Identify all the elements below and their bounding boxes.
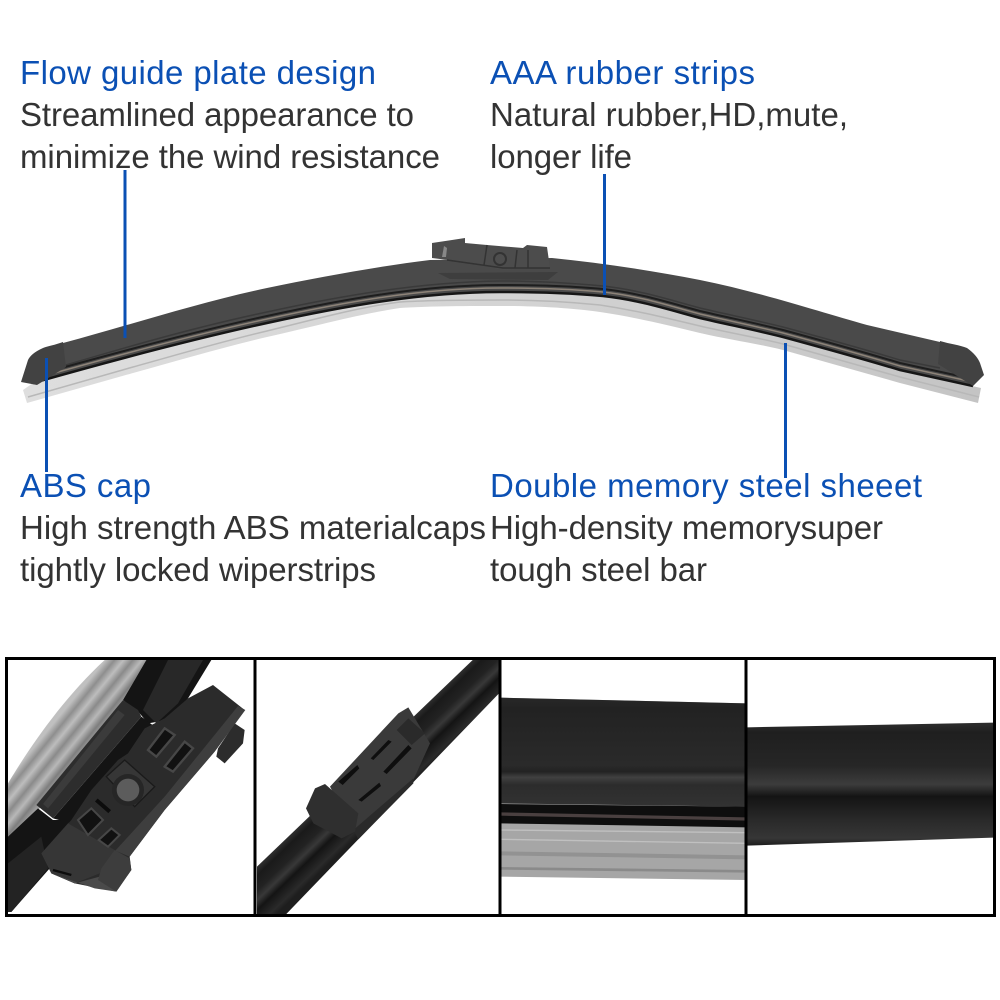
heading: ABS cap: tightly locked wiperstrips (20, 551, 376, 588)
heading: flow guide plate design: Streamlined appearance to (20, 96, 414, 133)
panel frames (6, 658, 994, 916)
clip (432, 238, 550, 270)
heading: AAA rubber strips: AAA rubber strips (490, 54, 755, 91)
heading: flow guide plate design: minimize the wind resistance (20, 138, 440, 175)
heading: flow guide plate design (20, 54, 440, 175)
end cap right (938, 341, 984, 386)
wiper blade illustration (21, 238, 984, 403)
end cap left (21, 342, 66, 385)
heading: flow guide plate design: Flow guide plate design (20, 54, 376, 91)
panel: adapter close-up (257, 659, 499, 915)
panel: blade body close-up (747, 723, 993, 846)
heading: ABS cap: High strength ABS materialcaps (20, 509, 486, 546)
panel: connector close-up (8, 660, 245, 912)
heading: AAA rubber strips: longer life (490, 138, 632, 175)
heading: AAA rubber strips (490, 54, 848, 175)
heading: double memory steel sheet: Double memory steel sheeet (490, 467, 922, 504)
heading: double memory steel sheet: High-density memorysuper (490, 509, 883, 546)
heading: ABS cap: ABS cap (20, 467, 151, 504)
heading: ABS cap (20, 467, 486, 588)
heading: double memory steel sheet (490, 467, 922, 588)
leader lines (45, 170, 787, 478)
lower clip wedge (438, 272, 558, 280)
panel: blade layers close-up (500, 698, 747, 880)
heading: double memory steel sheet: tough steel bar (490, 551, 707, 588)
heading: AAA rubber strips: Natural rubber,HD,mute, (490, 96, 848, 133)
